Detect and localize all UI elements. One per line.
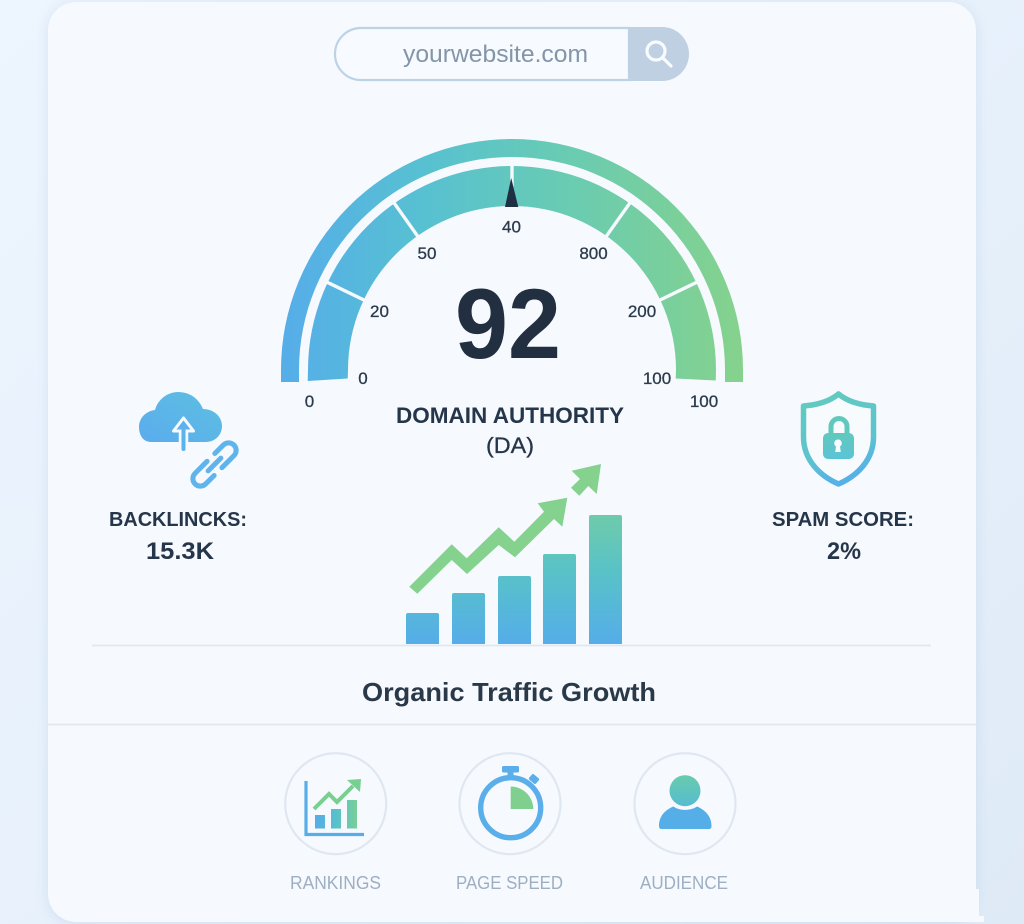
spam score metric: 2% — [827, 538, 861, 565]
chain link — [190, 440, 239, 489]
gauge separators — [325, 163, 699, 301]
domain authority label — [396, 403, 624, 458]
person head — [670, 775, 700, 806]
gauge outer arc — [281, 139, 743, 382]
chart title: Organic Traffic Growth — [362, 677, 656, 707]
divider — [48, 724, 976, 726]
backlinks metric: 15.3K — [146, 538, 215, 565]
url text: yourwebsite.com — [403, 41, 588, 68]
card corner artefact — [950, 889, 984, 922]
search bar — [335, 27, 689, 81]
backlinks metric — [109, 509, 247, 565]
gauge scale labels: 0 — [305, 392, 314, 411]
stopwatch — [481, 766, 541, 838]
gauge scale labels: 100 — [690, 392, 718, 411]
gauge scale labels: 800 — [579, 244, 608, 263]
spam score metric — [772, 509, 914, 565]
rankings item — [285, 753, 386, 893]
label: RANKINGS — [290, 873, 381, 893]
search button — [629, 27, 689, 81]
audience item — [634, 753, 736, 893]
trend arrow — [314, 779, 361, 809]
icon: magnifier — [647, 42, 671, 66]
gauge scale labels: 200 — [628, 302, 656, 321]
spam score metric: SPAM SCORE: — [772, 509, 914, 531]
icon ring — [634, 753, 736, 854]
gauge scale labels: 50 — [418, 244, 436, 263]
search input — [335, 28, 629, 80]
backlinks metric: BACKLINCKS: — [109, 509, 247, 531]
gauge scale labels — [305, 218, 718, 411]
shield — [804, 394, 874, 484]
upload arrow — [174, 418, 194, 449]
domain authority label: DOMAIN AUTHORITY — [396, 403, 624, 428]
divider — [92, 644, 931, 646]
mini bars — [315, 800, 357, 828]
arrow: growth trend — [409, 464, 601, 594]
keyhole — [834, 440, 842, 452]
person body — [659, 806, 712, 829]
gauge scale labels: 0 — [358, 369, 368, 388]
label: AUDIENCE — [640, 873, 728, 893]
icon ring — [460, 753, 560, 854]
lock shackle — [831, 418, 847, 435]
page speed item — [456, 753, 563, 893]
speed wedge — [511, 786, 533, 809]
icon: cloud and chain link — [139, 392, 239, 489]
gauge scale labels: 20 — [370, 302, 389, 321]
icon ring — [285, 753, 386, 854]
gauge scale labels: 40 — [502, 218, 521, 236]
label: PAGE SPEED — [456, 873, 563, 893]
needle — [505, 178, 518, 207]
gauge scale labels: 100 — [643, 369, 671, 388]
domain authority label: (DA) — [486, 433, 534, 458]
lock body — [823, 433, 854, 459]
gauge inner band — [308, 166, 716, 381]
icon: shield with lock — [804, 394, 874, 484]
score value: 92 — [455, 268, 561, 379]
gauge — [281, 139, 743, 411]
axes — [306, 781, 364, 834]
cloud — [139, 392, 222, 442]
chart: organic traffic bars — [406, 515, 622, 644]
